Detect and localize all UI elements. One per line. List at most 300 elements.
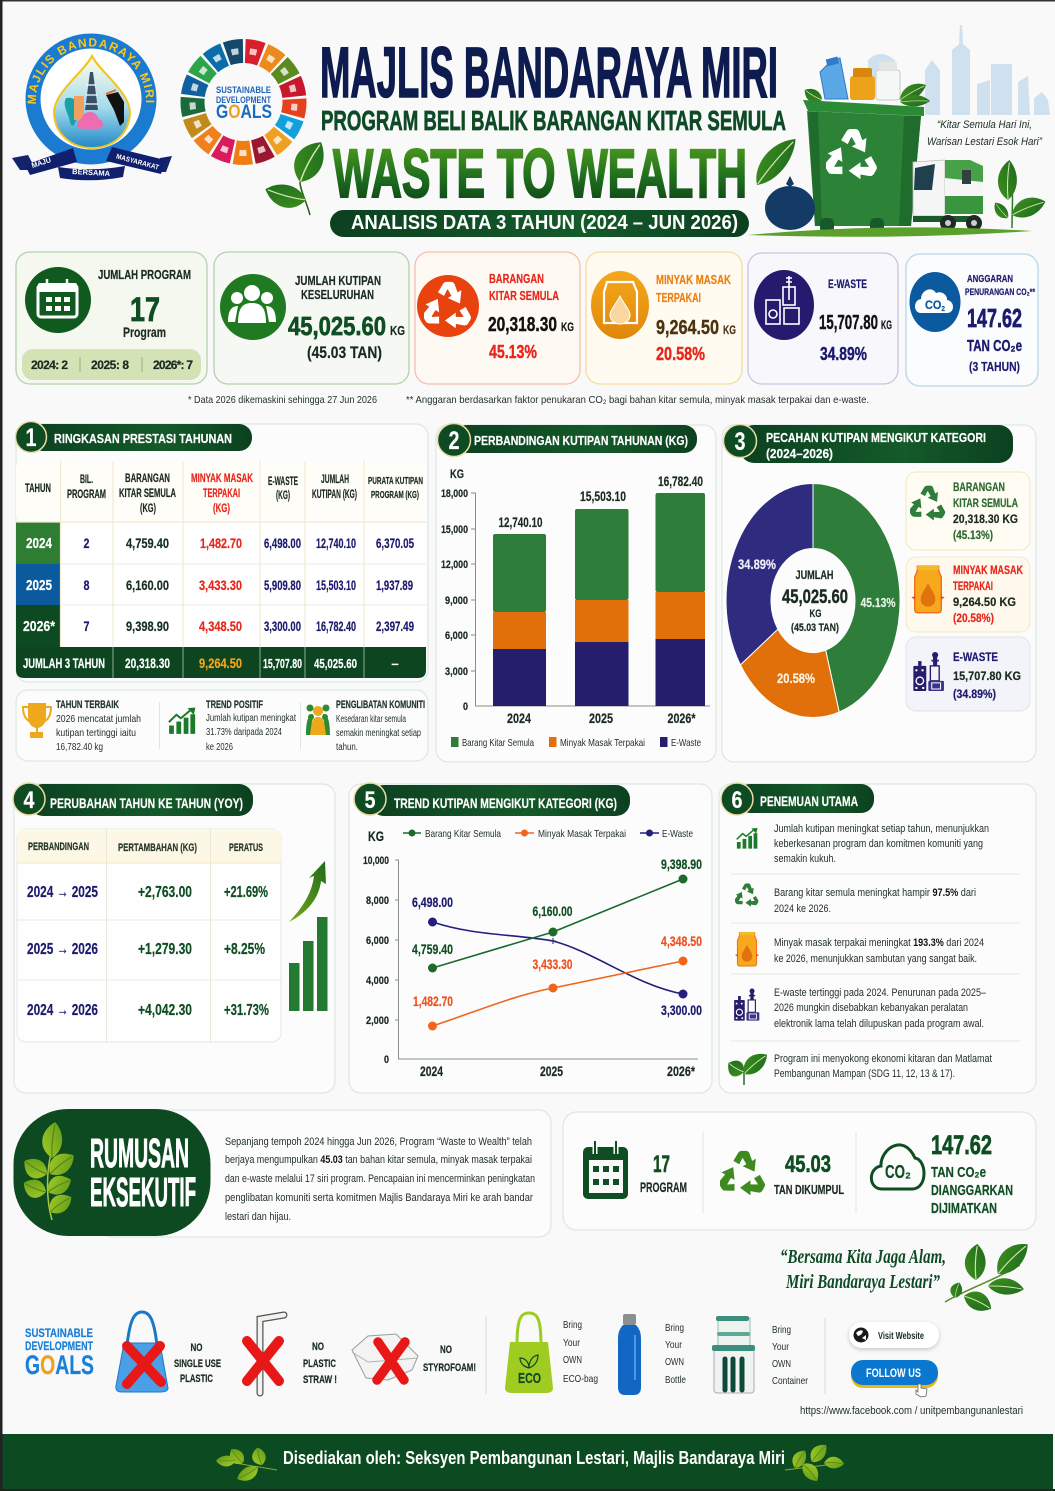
card: jumlah kutipan [214, 252, 409, 384]
table: year on year: PERBANDINGAN [28, 841, 89, 853]
stat: 17 program [583, 1141, 687, 1199]
illustration: rubbish bag [765, 176, 815, 230]
series: barang kitar semula: 6,160.00 [532, 904, 572, 919]
highlight: tahun terbaik: 2026 mencatat jumlah [56, 713, 141, 725]
skyline [868, 25, 1050, 115]
table: annual summary: KITAR SEMULA [119, 488, 176, 500]
table: year on year: PERTAMBAHAN (KG) [118, 842, 197, 854]
donut chart: JUMLAH [796, 570, 834, 582]
eco bag: Your [563, 1337, 580, 1349]
stat: tonnes collected [715, 1151, 844, 1199]
no single use plastic: PLASTIC [180, 1373, 213, 1385]
card: jumlah kutipan: KG [390, 323, 405, 338]
stacked bar chart: 9,000 [445, 595, 468, 607]
leaves right [785, 1440, 844, 1485]
finding 4 [734, 987, 987, 1030]
table: year on year: PERATUS [229, 842, 263, 854]
icon: CO2 cloud: 2 [941, 306, 945, 313]
bottle: Bottle [665, 1374, 686, 1386]
table: year on year: +2,763.00 [138, 884, 192, 901]
finding 2 [732, 883, 976, 915]
icon: bottle [618, 1314, 641, 1395]
line chart: 0 [384, 1054, 389, 1066]
table: annual summary: 2024 [26, 535, 53, 552]
finding 1: semakin kukuh. [774, 853, 836, 865]
legend card: minyak masak: MINYAK MASAK [953, 565, 1024, 577]
donut chart: (45.03 TAN) [791, 622, 839, 634]
program count by year: 2024: 2 [31, 358, 68, 372]
finding 1: keberkesanan program dan komitmen komuniti yang [774, 838, 983, 850]
slogan [780, 1246, 946, 1293]
finding 5: Pembangunan Mampan (SDG 11, 12, 13 & 17). [774, 1068, 955, 1080]
stat: CO2: CO₂ [885, 1162, 911, 1182]
container: OWN [772, 1358, 791, 1370]
heading 4: PERUBAHAN TAHUN KE TAHUN (YOY) [50, 795, 243, 811]
stat: tonnes collected: 45.03 [785, 1151, 831, 1178]
card: CO2 reduction estimate: TAN CO₂e [967, 338, 1022, 355]
card: jumlah program: Program [123, 324, 166, 340]
illustration: grass [748, 227, 1032, 237]
table: annual summary: 3,300.00 [264, 619, 301, 634]
stacked bar chart: 2026* [668, 711, 696, 726]
leaves left [216, 1445, 277, 1485]
card: CO2 reduction estimate: (3 TAHUN) [969, 359, 1020, 374]
summary text: Sepanjang tempoh 2024 hingga Jun 2026, Program “Waste to Wealth” telah [225, 1136, 532, 1148]
stacked bar chart: 12,740.10 [498, 515, 542, 530]
bottle: Bring [665, 1322, 684, 1334]
legend card: minyak masak: (20.58%) [953, 613, 994, 625]
program count by year: 2026*: 7 [153, 358, 193, 372]
card: barangan kitar semula: KITAR SEMULA [489, 289, 559, 303]
table: annual summary: 6,498.00 [264, 536, 301, 551]
table: annual summary: JUMLAH 3 TAHUN [23, 656, 105, 671]
finding 2: Barang kitar semula meningkat hampir 97.5% dari [774, 887, 976, 899]
panel 2: perbandingan kutipan tahunan [436, 424, 716, 762]
table: annual summary: 4,759.40 [126, 535, 169, 551]
bar 2024 [493, 534, 546, 706]
finding 1: Jumlah kutipan meningkat setiap tahun, menunjukkan [774, 823, 989, 835]
no styrofoam: STYROFOAM! [423, 1362, 476, 1374]
highlight: penglibatan komuniti: PENGLIBATAN KOMUNITI [336, 699, 425, 711]
card: CO2 reduction estimate [906, 254, 1038, 386]
stacked bar chart: 2025 [589, 711, 613, 726]
table: annual summary: E-WASTE [268, 476, 298, 488]
heading 1: 1 [26, 424, 37, 452]
highlight: trend positif: ke 2026 [206, 741, 233, 753]
stat: CO2: DIANGGARKAN [931, 1182, 1013, 1199]
no single use plastic [116, 1312, 221, 1392]
table: annual summary: 6,160.00 [126, 577, 169, 593]
heading 1: RINGKASAN PRESTASI TAHUNAN [54, 431, 232, 446]
follow us button: FOLLOW US [866, 1368, 921, 1380]
heading 4 [13, 783, 253, 816]
logo: Majlis Bandaraya Miri: MAJU [30, 155, 52, 170]
SDG mini logo: GOALS [25, 1350, 94, 1380]
stacked bar chart: 15,503.10 [580, 489, 626, 504]
credit text: Disediakan oleh: Seksyen Pembangunan Lestari, Majlis Bandaraya Miri [283, 1448, 785, 1468]
card: e-waste: 34.89% [820, 344, 867, 364]
eco bag: Bring [563, 1319, 582, 1331]
icon: calendar [25, 267, 91, 333]
heading 2: PERBANDINGAN KUTIPAN TAHUNAN (KG) [474, 433, 688, 448]
panel: summary stats [563, 1112, 1036, 1230]
card: jumlah program: 17 [130, 291, 160, 329]
series: minyak masak terpakai: 3,433.30 [532, 957, 572, 972]
header [12, 25, 1050, 237]
highlight: tahun terbaik [56, 699, 141, 753]
table: annual summary: 45,025.60 [314, 656, 357, 671]
legend card: e-waste: (34.89%) [953, 689, 996, 701]
footer band [0, 1434, 1055, 1491]
bar 2025 [575, 509, 628, 706]
legend card: minyak masak [906, 557, 1030, 632]
card: CO2 reduction estimate: 147.62 [967, 303, 1022, 333]
finding 4: 2026 mungkin disebabkan kebanyakan peralatan [774, 1002, 968, 1014]
series: barang kitar semula [412, 857, 702, 972]
finding 1 [737, 823, 989, 865]
no styrofoam: NO [440, 1344, 452, 1356]
table: annual summary: 1,937.89 [376, 578, 413, 593]
line chart: 8,000 [366, 895, 389, 907]
card: barangan kitar semula: 45.13% [489, 342, 537, 362]
stacked bar chart: 3,000 [445, 666, 468, 678]
table: annual summary: 3,433.30 [199, 577, 242, 593]
table: annual summary: – [391, 656, 399, 671]
table: annual summary: BIL. [80, 474, 93, 486]
donut chart: 45,025.60 [782, 587, 848, 608]
stat: CO2 [871, 1130, 1013, 1217]
summary text: lestari dan hijau. [225, 1211, 291, 1223]
logo: SDG wheel: GOALS [216, 102, 272, 123]
finding 4: elektronik lama telah dilupuskan pada program awal. [774, 1018, 984, 1030]
legend card: minyak masak: 9,264.50 KG [953, 595, 1016, 609]
heading leaf left [262, 135, 331, 215]
table: year on year: 2025 → 2026 [27, 941, 98, 958]
panel 1: ringkasan prestasi tahunan [16, 422, 428, 682]
legend card: barangan kitar semula: 20,318.30 KG [953, 512, 1018, 526]
card: minyak masak terpakai: 9,264.50 [656, 317, 719, 339]
stat: CO2: 147.62 [931, 1130, 992, 1160]
analysis period pill: ANALISIS DATA 3 TAHUN (2024 – JUN 2026) [351, 212, 738, 234]
stacked bar chart: 6,000 [445, 630, 468, 642]
panel 5: trend kutipan [349, 783, 712, 1093]
footnotes: ** Anggaran berdasarkan faktor penukaran CO₂ bagi bahan kitar semula, minyak masak terpakai dan e-waste. [406, 394, 869, 406]
container: Bring [772, 1324, 791, 1336]
card: e-waste: E-WASTE [828, 277, 867, 291]
table: year on year: +21.69% [224, 884, 268, 901]
legend card: e-waste [906, 637, 1030, 711]
card: minyak masak terpakai: MINYAK MASAK [656, 273, 731, 287]
quote: Warisan Lestari Esok Hari” [927, 136, 1043, 148]
slogan: “Bersama Kita Jaga Alam, [780, 1246, 946, 1268]
table: annual summary: MINYAK MASAK [191, 473, 253, 485]
chart legend: Barang Kitar Semula [462, 737, 534, 749]
table: year on year: +31.73% [224, 1002, 269, 1019]
quote [927, 119, 1043, 148]
card: minyak masak terpakai: 20.58% [656, 344, 705, 364]
eco bag: OWN [563, 1354, 582, 1366]
logo: SDG wheel [171, 30, 316, 174]
highlight: penglibatan komuniti: Kesedaran kitar semula [336, 714, 406, 725]
series: minyak masak terpakai [413, 934, 702, 1030]
table: year on year: +8.25% [224, 941, 265, 958]
highlight: trend positif: TREND POSITIF [206, 699, 263, 711]
follow us button [851, 1360, 938, 1397]
line chart: 2026* [667, 1064, 696, 1079]
table: annual summary: PROGRAM [67, 489, 106, 501]
stacked bar chart: 2024 [507, 711, 531, 726]
footnotes: * Data 2026 dikemaskini sehingga 27 Jun 2026 [188, 394, 377, 406]
SDG mini logo [25, 1328, 94, 1380]
table: annual summary: TERPAKAI [203, 488, 240, 500]
container: Your [772, 1341, 789, 1353]
illustration: truck [913, 160, 983, 231]
table: annual summary: BARANGAN [125, 473, 170, 485]
visit website button: Visit Website [878, 1331, 924, 1342]
table: annual summary: 1,482.70 [200, 535, 242, 551]
summary text [225, 1136, 535, 1223]
chart legend: E-Waste [671, 737, 701, 749]
card: e-waste [748, 253, 898, 384]
heading 6: 6 [732, 787, 742, 814]
container [712, 1316, 808, 1393]
stacked bar chart: 12,000 [441, 559, 468, 571]
table: annual summary: 7 [84, 618, 90, 634]
panel 4: perubahan tahun ke tahun [13, 783, 335, 1093]
card: barangan kitar semula: 20,318.30 [488, 314, 557, 336]
heading leaf right [747, 131, 803, 191]
no single use plastic: SINGLE USE [174, 1358, 221, 1370]
panel 3: pecahan kutipan [722, 424, 1036, 762]
panel: highlights [16, 690, 428, 761]
icon: CO2 cloud: CO [925, 298, 943, 312]
website url: https://www.facebook.com / unitpembangunanlestari [800, 1405, 1023, 1417]
heading 2 [438, 424, 697, 456]
no plastic straw [247, 1315, 337, 1393]
card: minyak masak terpakai: TERPAKAI [656, 291, 701, 305]
stat: 17 program: 17 [653, 1151, 670, 1178]
card: e-waste: KG [881, 318, 892, 332]
series: minyak masak terpakai: 1,482.70 [413, 994, 453, 1009]
table: annual summary: PURATA KUTIPAN [368, 475, 423, 487]
donut chart: 45.13% [860, 595, 896, 610]
legend card: barangan kitar semula: (45.13%) [953, 530, 993, 542]
heading block [14, 1109, 210, 1236]
icon: plastic bag [116, 1312, 168, 1392]
no styrofoam [352, 1334, 476, 1380]
finding 5 [724, 1048, 992, 1085]
heading 6 [721, 783, 874, 815]
highlight: trend positif: 31.73% daripada 2024 [206, 726, 282, 738]
SDG mini logo: DEVELOPMENT [25, 1341, 93, 1353]
bottle: OWN [665, 1356, 684, 1368]
table: annual summary: 15,503.10 [316, 578, 356, 593]
panel: rumusan eksekutif [14, 1109, 551, 1237]
table: annual summary: 20,318.30 [125, 656, 170, 671]
line chart: 10,000 [363, 855, 389, 867]
summary text: penglibatan komuniti serta komitmen Majlis Bandaraya Miri ke arah bandar [225, 1192, 533, 1204]
highlight: tahun terbaik: kutipan tertinggi iaitu [56, 727, 136, 739]
line chart: 2024 [420, 1064, 443, 1079]
heading 3: (2024–2026) [766, 446, 833, 461]
heading 5 [354, 783, 630, 816]
summary text: dan e-waste melalui 17 siri program. Pencapaian ini mencerminkan peningkatan [225, 1173, 535, 1185]
bar 2026 [656, 493, 705, 706]
table: annual summary: 9,264.50 [199, 655, 242, 671]
table: annual summary: (KG) [140, 503, 156, 515]
eco bag: ECO-bag [563, 1373, 598, 1385]
stat: CO2: TAN CO₂e [931, 1164, 986, 1181]
main heading: waste to wealth: WASTE TO WEALTH [333, 135, 747, 212]
highlight: trend positif: Jumlah kutipan meningkat [206, 712, 296, 724]
table: annual summary: 9,398.90 [126, 618, 169, 634]
icon: people [220, 274, 286, 340]
stacked bar chart: 16,782.40 [658, 474, 703, 489]
stat: 17 program: PROGRAM [640, 1179, 687, 1195]
program count by year [22, 349, 201, 380]
table: annual summary: 8 [84, 577, 90, 593]
table: annual summary: 2 [84, 535, 90, 551]
table: annual summary: 2,397.49 [376, 619, 414, 634]
table: annual summary: TAHUN [25, 483, 51, 495]
logo: SDG wheel: DEVELOPMENT [216, 95, 271, 106]
heading block: EKSEKUTIF [90, 1169, 196, 1215]
icon: straw [247, 1315, 284, 1393]
highlight: penglibatan komuniti: tahun. [336, 742, 358, 753]
panel 6: penemuan utama [719, 783, 1036, 1093]
table: annual summary: 2025 [26, 577, 52, 594]
heading 5: TREND KUTIPAN MENGIKUT KATEGORI (KG) [394, 795, 617, 811]
logo: Majlis Bandaraya Miri: MASYARAKAT [115, 153, 160, 172]
highlight: tahun terbaik: 16,782.40 kg [56, 741, 103, 753]
card: barangan kitar semula: BARANGAN [489, 272, 544, 286]
footnotes [188, 394, 869, 406]
bottle: Your [665, 1339, 682, 1351]
series: barang kitar semula: 9,398.90 [661, 857, 702, 872]
table: year on year: +4,042.30 [138, 1002, 192, 1019]
line chart legend [403, 828, 693, 840]
line chart legend: Minyak Masak Terpakai [538, 828, 626, 840]
table: annual summary: 2026* [23, 618, 55, 635]
table: annual summary: 16,782.40 [316, 619, 356, 634]
card: jumlah kutipan: KESELURUHAN [301, 287, 374, 302]
heading 5: 5 [364, 787, 376, 814]
table: annual summary: 15,707.80 [263, 656, 302, 671]
no single use plastic: NO [190, 1342, 203, 1354]
finding 3 [735, 932, 984, 966]
logo: Majlis Bandaraya Miri [12, 34, 172, 180]
heading 3 [724, 424, 1013, 463]
stacked bar chart: KG [450, 467, 464, 481]
table: annual summary: 6,370.05 [376, 536, 414, 551]
program count by year: 2025: 8 [91, 358, 129, 372]
card: CO2 reduction estimate: PENURANGAN CO₂** [965, 287, 1035, 297]
card: CO2 reduction estimate: ANGGARAN [967, 273, 1013, 285]
table: annual summary: JUMLAH [321, 474, 349, 486]
table: year on year: +1,279.30 [138, 941, 192, 958]
table: annual summary: (KG) [276, 490, 290, 502]
icon: CO2 cloud [910, 272, 960, 332]
heading 3: PECAHAN KUTIPAN MENGIKUT KATEGORI [766, 430, 986, 445]
icon: eco bag: ECO [518, 1370, 541, 1387]
series: e-waste [412, 895, 702, 1018]
chart legend: Minyak Masak Terpakai [560, 737, 645, 749]
line chart: 6,000 [366, 935, 389, 947]
highlight: penglibatan komuniti: semakin meningkat setiap [336, 728, 421, 739]
card: jumlah kutipan: (45.03 TAN) [307, 343, 382, 362]
table: annual summary: KUTIPAN (KG) [312, 489, 357, 501]
icon: food container [712, 1316, 755, 1393]
container: Container [772, 1375, 808, 1387]
icon: community [306, 704, 330, 735]
leaves sprig [945, 1236, 1034, 1316]
line chart: 4,000 [366, 975, 389, 987]
icon: oil [591, 271, 649, 339]
logo: SDG wheel: SUSTAINABLE [216, 85, 271, 96]
donut chart: KG [810, 608, 822, 620]
donut chart: 34.89% [738, 557, 776, 572]
finding 2: 2024 ke 2026. [774, 903, 831, 915]
line chart [363, 828, 702, 1079]
line chart: 2025 [540, 1064, 563, 1079]
table: year on year: 2024 → 2025 [27, 884, 98, 901]
logo: Majlis Bandaraya Miri: BERSAMA [72, 167, 111, 178]
no plastic straw: PLASTIC [303, 1358, 336, 1370]
heading 4: 4 [24, 787, 35, 814]
heading 3: 3 [734, 428, 746, 456]
card: e-waste: 15,707.80 [819, 312, 878, 334]
no plastic straw: NO [312, 1341, 324, 1353]
illustration: plant [990, 160, 1048, 228]
table: annual summary: 4,348.50 [199, 618, 242, 634]
icon: rising chart [169, 708, 195, 734]
series: e-waste: 3,300.00 [661, 1003, 702, 1018]
finding 3: ke 2026, menunjukkan sambutan yang sangat baik. [774, 953, 977, 965]
table: year on year [17, 829, 281, 1042]
SDG mini logo: SUSTAINABLE [25, 1328, 93, 1340]
table: annual summary: 5,909.80 [264, 578, 301, 593]
line chart: KG [368, 828, 384, 844]
legend card: minyak masak: TERPAKAI [953, 581, 993, 593]
legend card: e-waste: 15,707.80 KG [953, 669, 1021, 683]
finding 5: Program ini menyokong ekonomi kitaran dan Matlamat [774, 1053, 992, 1065]
heading block: RUMUSAN [90, 1130, 189, 1176]
table: annual summary: (KG) [213, 503, 230, 515]
line chart legend: E-Waste [662, 828, 693, 840]
card: jumlah program: JUMLAH PROGRAM [98, 267, 191, 282]
highlight: tahun terbaik: TAHUN TERBAIK [56, 699, 119, 711]
card: minyak masak terpakai: KG [723, 323, 736, 337]
subtitle: PROGRAM BELI BALIK BARANGAN KITAR SEMULA [321, 105, 786, 136]
icon: styrofoam box [352, 1334, 418, 1380]
series: minyak masak terpakai: 4,348.50 [661, 934, 702, 949]
table: annual summary: PROGRAM (KG) [371, 489, 419, 501]
icon: growth bars with arrow [289, 861, 328, 1011]
finding 3: Minyak masak terpakai meningkat 193.3% dari 2024 [774, 937, 984, 949]
table: year on year: 2024 → 2026 [27, 1002, 98, 1019]
visit website button [849, 1322, 939, 1348]
stacked bar chart: 18,000 [441, 488, 468, 500]
legend card: e-waste: E-WASTE [953, 650, 998, 664]
card: barangan kitar semula [415, 252, 580, 384]
icon: trophy [23, 703, 51, 738]
line chart legend: Barang Kitar Semula [425, 828, 501, 840]
legend card: barangan kitar semula: BARANGAN [953, 482, 1005, 494]
table: annual summary: 12,740.10 [316, 536, 356, 551]
heading 2: 2 [448, 427, 460, 455]
donut chart: 20.58% [777, 671, 815, 686]
eco bag [505, 1313, 598, 1393]
